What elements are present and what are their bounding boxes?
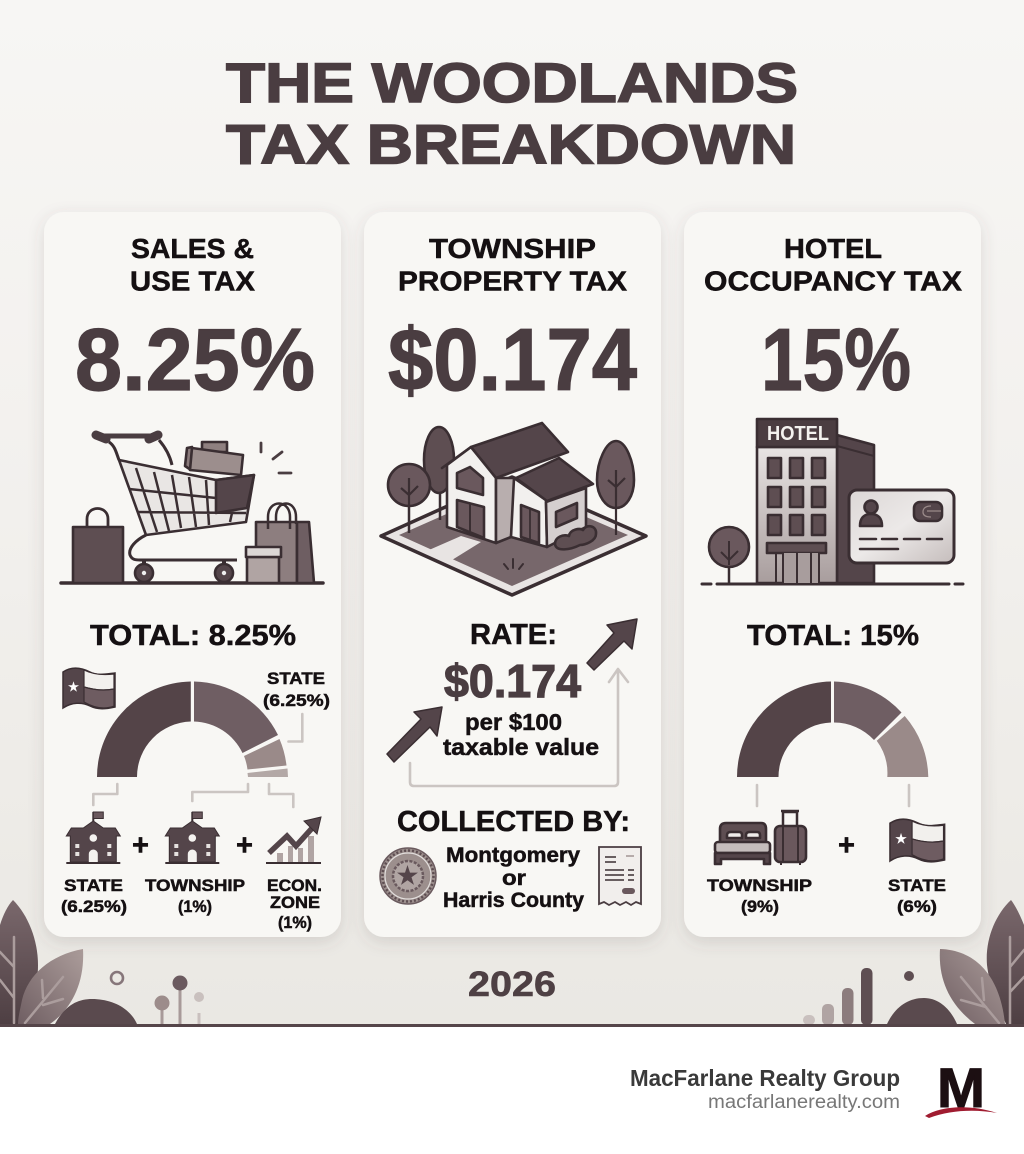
footer: company name and url: macfarlanerealty.com	[708, 1092, 900, 1113]
heading: township property tax	[398, 233, 627, 296]
icon: receipt	[599, 847, 641, 905]
icon: texas flag	[890, 819, 945, 862]
label: township 1%: (1%)	[178, 897, 212, 916]
heading: total 15%: TOTAL: 15%	[747, 620, 919, 652]
icon: shopping cart with bags	[61, 435, 323, 583]
heading: sales and use tax	[130, 233, 255, 296]
callout: state 6.25%: (6.25%)	[263, 691, 330, 710]
arrow: lower up arrow	[387, 707, 442, 762]
panel: hotel occupancy tax	[684, 212, 981, 937]
big number: 15%: 15%	[761, 310, 911, 409]
title: TAX BREAKDOWN	[226, 112, 796, 176]
big number: 8.25%: 8.25%	[75, 310, 315, 409]
arrow: upper up arrow	[587, 619, 637, 670]
rate value: $0.174: $0.174	[444, 655, 581, 707]
label: state 6%: (6%)	[897, 897, 937, 916]
text: montgomery or harris county: or	[502, 867, 526, 890]
arrow: light connector	[410, 669, 628, 786]
label: state 6.25%	[61, 876, 127, 916]
plus sign: +	[132, 829, 149, 862]
label: econ zone 1%: ZONE	[270, 893, 320, 912]
decoration: left foliage	[0, 900, 204, 1024]
text: per $100 taxable value	[443, 709, 599, 760]
plus sign: +	[838, 829, 855, 862]
title: THE WOODLANDS	[226, 51, 798, 114]
label: econ zone 1%: ECON.	[267, 876, 322, 895]
text: montgomery or harris county: Montgomery	[446, 844, 580, 867]
label: state 6%: STATE	[888, 876, 946, 895]
bottom band line	[0, 1024, 1024, 1027]
label: township 9%: TOWNSHIP	[707, 876, 812, 895]
label: econ zone 1%: (1%)	[278, 913, 312, 932]
text: per $100 taxable value: taxable value	[443, 734, 599, 760]
heading: hotel occupancy tax	[704, 233, 962, 296]
icon: township building	[165, 812, 219, 863]
plus sign: +	[236, 829, 253, 862]
label: township 9%	[707, 876, 812, 916]
heading: sales and use tax: SALES &	[131, 233, 254, 264]
heading: hotel occupancy tax: HOTEL	[784, 233, 882, 264]
chart: semi donut hotel tax	[737, 682, 928, 777]
footer: M logo	[925, 1056, 997, 1119]
panel: sales and use tax	[44, 212, 341, 937]
text: per $100 taxable value: per $100	[465, 709, 562, 735]
heading: rate: RATE:	[470, 619, 557, 651]
icon: county seal	[380, 848, 436, 904]
text: montgomery or harris county	[443, 844, 584, 912]
callout: state 6.25%: STATE	[267, 669, 325, 688]
label: state 6.25%: (6.25%)	[61, 897, 127, 916]
footer: M logo: M	[937, 1056, 985, 1119]
decoration: right bars and foliage	[803, 900, 1024, 1025]
callout: state 6.25%	[263, 669, 330, 742]
label: township 1%	[145, 876, 245, 916]
big number: $0.174: $0.174	[388, 310, 637, 409]
heading: collected by: COLLECTED BY:	[397, 806, 630, 838]
label: township 9%: (9%)	[741, 897, 779, 916]
chart: semi donut sales tax	[97, 682, 288, 777]
heading: township property tax: TOWNSHIP	[429, 233, 596, 264]
footer: company name and url	[630, 1065, 900, 1113]
icon: hotel with key card: HOTEL	[767, 423, 829, 445]
label: state 6%	[888, 876, 946, 916]
label: state 6.25%: STATE	[64, 876, 123, 895]
year label: 2026	[468, 965, 556, 1004]
title	[226, 51, 798, 176]
icon: texas flag	[63, 668, 115, 709]
icon: hotel with key card	[702, 419, 963, 584]
icon: house on lot	[381, 423, 646, 595]
text: montgomery or harris county: Harris County	[443, 889, 584, 912]
panel: township property tax	[364, 212, 661, 937]
icon: state building	[66, 812, 120, 863]
heading: hotel occupancy tax: OCCUPANCY TAX	[704, 266, 962, 296]
heading: sales and use tax: USE TAX	[130, 266, 255, 296]
heading: total 8.25%: TOTAL: 8.25%	[90, 620, 296, 652]
heading: township property tax: PROPERTY TAX	[398, 266, 627, 296]
label: township 1%: TOWNSHIP	[145, 876, 245, 895]
footer: company name and url: MacFarlane Realty Group	[630, 1065, 900, 1091]
icon: bed and suitcase	[715, 811, 806, 865]
icon: growth chart arrow	[266, 817, 321, 863]
label: econ zone 1%	[267, 876, 322, 932]
